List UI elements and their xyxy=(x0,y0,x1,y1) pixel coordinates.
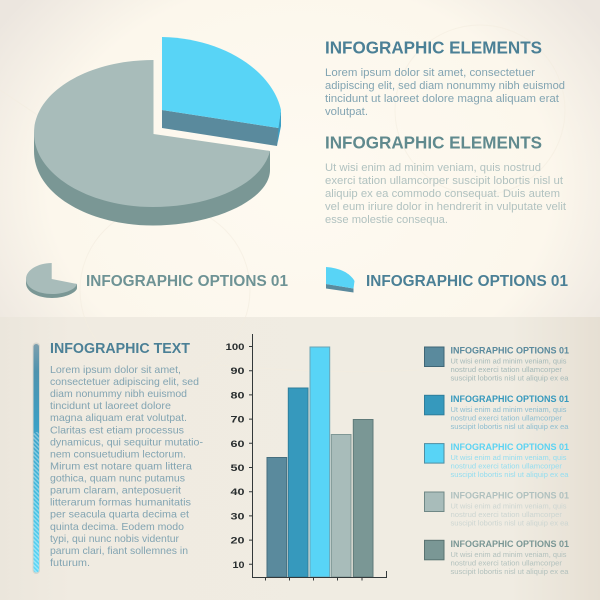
text block: side paragraph: Mirum est notare quam littera xyxy=(50,460,192,472)
legend item 3: INFOGRAPHIC OPTIONS 01 xyxy=(450,442,569,452)
bar chart xyxy=(226,334,386,580)
heading: infographic text: INFOGRAPHIC TEXT xyxy=(50,341,190,357)
text block: paragraph 2: Ut wisi enim ad minim veniam, quis nostrud xyxy=(325,162,541,174)
background: lower paper panel xyxy=(0,317,600,600)
chart: y-axis labels: 100 xyxy=(226,342,244,353)
legend item 3: nostrud exerci tation ullamcorper xyxy=(450,462,562,471)
text block: side paragraph: parum clari, fiant sollemnes in xyxy=(50,545,188,557)
legend item 1: Ut wisi enim ad minim veniam, quis xyxy=(450,356,567,366)
pie: grey slice side xyxy=(34,133,270,226)
text block: paragraph 1: Lorem ipsum dolor sit amet, consectetuer xyxy=(325,67,535,79)
text block: paragraph 1: volutpat. xyxy=(325,106,368,118)
pie: blue slice side xyxy=(162,110,278,146)
legend item 3 xyxy=(424,442,569,479)
side bar: gradient vertical bar xyxy=(32,342,40,574)
chart: axes xyxy=(249,334,386,580)
option label: grey: INFOGRAPHIC OPTIONS 01 xyxy=(86,273,288,290)
chart: y-axis labels: 20 xyxy=(230,536,244,547)
text block: side paragraph: typi, qui nunc nobis videntur xyxy=(50,533,179,545)
text block: side paragraph: futurum. xyxy=(50,557,90,569)
icon: mini grey pie xyxy=(26,263,77,298)
chart: bars xyxy=(267,347,373,577)
legend item 4: nostrud exerci tation ullamcorper xyxy=(450,510,562,519)
legend item 1: INFOGRAPHIC OPTIONS 01 xyxy=(450,346,569,356)
text block: paragraph 2: aliquip ex ea commodo consequat. Duis autem xyxy=(325,188,560,200)
legend item 1 xyxy=(424,346,569,382)
icon: mini blue slice xyxy=(326,267,354,292)
heading: elements 1: INFOGRAPHIC ELEMENTS xyxy=(325,38,542,58)
legend item 2 xyxy=(424,394,569,431)
text block: side paragraph: parum claram, anteposuerit xyxy=(50,485,181,497)
chart: y-axis labels xyxy=(226,342,244,571)
legend item 5: INFOGRAPHIC OPTIONS 01 xyxy=(450,539,569,549)
legend item 1: nostrud exerci tation ullamcorper xyxy=(450,365,562,374)
legend item 5: nostrud exerci tation ullamcorper xyxy=(450,558,562,567)
legend item 5 xyxy=(424,539,569,576)
legend item 4 xyxy=(424,490,569,528)
text block: side paragraph: nem consuetudium lectorum. xyxy=(50,448,186,460)
text block: side paragraph: magna aliquam erat volutpat. xyxy=(50,412,187,424)
legend item 4: suscipit lobortis nisl ut aliquip ex ea xyxy=(450,518,569,528)
text block: paragraph 2: vel eum iriure dolor in hendrerit in vulputate velit xyxy=(325,201,566,213)
text block: paragraph 2: exerci tation ullamcorper suscipit lobortis nisl ut xyxy=(325,175,563,187)
chart: y-axis labels: 50 xyxy=(230,463,244,474)
chart: y-axis labels: 10 xyxy=(232,560,244,571)
pie: blue slice rim xyxy=(277,110,281,146)
legend item 3: suscipit lobortis nisl ut aliquip ex ea xyxy=(450,470,569,479)
chart: y-axis labels: 90 xyxy=(230,366,244,377)
text block: side paragraph xyxy=(50,364,204,569)
legend item 1: suscipit lobortis nisl ut aliquip ex ea xyxy=(450,374,569,382)
text block: paragraph 2 xyxy=(325,162,566,226)
text block: side paragraph: dynamicus, qui sequitur mutatio- xyxy=(50,436,204,448)
legend item 3: Ut wisi enim ad minim veniam, quis xyxy=(450,453,567,462)
chart: y-axis labels: 60 xyxy=(230,439,244,450)
legend item 2: INFOGRAPHIC OPTIONS 01 xyxy=(450,394,569,404)
text block: side paragraph: Lorem ipsum dolor sit amet, xyxy=(50,364,181,376)
option label: blue: INFOGRAPHIC OPTIONS 01 xyxy=(366,273,568,290)
text block: side paragraph: Claritas est etiam processus xyxy=(50,424,184,436)
chart: y-axis labels: 40 xyxy=(230,487,244,498)
text block: side paragraph: tincidunt ut laoreet dolore xyxy=(50,400,171,412)
legend item 5: Ut wisi enim ad minim veniam, quis xyxy=(450,550,567,559)
text block: side paragraph: consectetuer adipiscing elit, sed xyxy=(50,376,199,388)
text block: side paragraph: per seacula quarta decima et xyxy=(50,509,189,521)
legend item 2: Ut wisi enim ad minim veniam, quis xyxy=(450,405,567,414)
background: upper paper xyxy=(0,0,600,317)
text block: side paragraph: diam nonummy nibh euismod xyxy=(50,388,187,400)
legend item 4: Ut wisi enim ad minim veniam, quis xyxy=(450,502,567,510)
text block: paragraph 1 xyxy=(325,67,565,118)
text block: paragraph 1: adipiscing elit, sed diam nonummy nibh euismod xyxy=(325,80,565,92)
chart: y-axis labels: 70 xyxy=(230,415,244,426)
text block: side paragraph: quinta decima. Eodem modo xyxy=(50,521,184,533)
pie: blue slice top xyxy=(162,37,281,128)
text block: paragraph 1: tincidunt ut laoreet dolore magna aliquam erat xyxy=(325,93,559,105)
text block: side paragraph: litterarum formas humanitatis xyxy=(50,497,191,509)
pie: grey slice top xyxy=(34,60,270,207)
chart: y-axis labels: 80 xyxy=(230,390,244,401)
heading: elements 2: INFOGRAPHIC ELEMENTS xyxy=(325,132,542,152)
legend item 4: INFOGRAPHIC OPTIONS 01 xyxy=(450,490,569,500)
text block: paragraph 2: esse molestie consequa. xyxy=(325,214,448,226)
pie chart: large xyxy=(34,37,281,226)
legend item 2: nostrud exerci tation ullamcorper xyxy=(450,413,562,422)
chart: y-axis labels: 30 xyxy=(230,511,244,522)
text block: side paragraph: gothica, quam nunc putamus xyxy=(50,472,185,484)
legend item 2: suscipit lobortis nisl ut aliquip ex ea xyxy=(450,422,569,431)
legend item 5: suscipit lobortis nisl ut aliquip ex ea xyxy=(450,567,569,576)
